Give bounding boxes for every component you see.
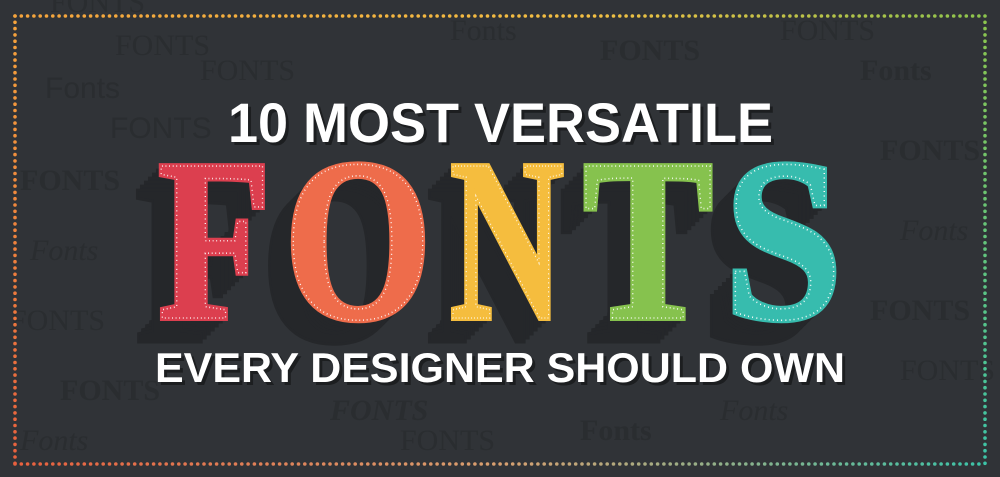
background pattern words: FONTS bbox=[110, 112, 212, 145]
background pattern words: FONTS bbox=[880, 134, 980, 167]
letter O: O bbox=[284, 111, 432, 368]
letter N: N bbox=[450, 111, 564, 368]
title line 1: 10 MOST VERSATILE bbox=[228, 91, 773, 154]
background pattern words: Fonts bbox=[580, 414, 652, 447]
background pattern words: Fonts bbox=[19, 424, 88, 457]
background pattern words: Fonts bbox=[719, 394, 788, 427]
letter shadows bbox=[134, 115, 839, 393]
background pattern words: FONTS bbox=[329, 394, 428, 427]
background pattern words: FONTS bbox=[400, 424, 495, 457]
background pattern words: FONTS bbox=[10, 304, 105, 337]
letter F: F bbox=[158, 113, 271, 369]
background pattern words: Fonts bbox=[45, 72, 120, 105]
background pattern words: Fonts bbox=[450, 14, 517, 47]
background pattern words: Fonts bbox=[899, 214, 968, 247]
title line 2: EVERY DESIGNER SHOULD OWN bbox=[158, 347, 848, 394]
background pattern words: Fonts bbox=[860, 54, 932, 87]
title line 2: EVERY DESIGNER SHOULD OWN bbox=[155, 344, 845, 391]
letter O: O bbox=[284, 111, 432, 368]
title line 1: 10 MOST VERSATILE bbox=[231, 94, 776, 157]
background pattern words: FONTS bbox=[115, 29, 210, 62]
background pattern words: FONTS bbox=[60, 374, 160, 407]
letter T: T bbox=[583, 112, 713, 369]
big FONTS letters bbox=[134, 111, 843, 393]
letter S: S bbox=[724, 112, 843, 369]
background pattern words: FONTS bbox=[870, 294, 970, 327]
background pattern words: FONTS bbox=[600, 34, 700, 67]
background pattern words: FONTS bbox=[780, 14, 875, 47]
letter S: S bbox=[724, 112, 843, 369]
background pattern words: Fonts bbox=[29, 234, 98, 267]
letter F: F bbox=[158, 113, 271, 369]
background pattern words: FONTS bbox=[200, 54, 295, 87]
background pattern words: FONTS bbox=[900, 354, 995, 387]
background pattern words: FONTS bbox=[20, 164, 120, 197]
letter T: T bbox=[583, 112, 713, 369]
letter N: N bbox=[450, 111, 564, 368]
